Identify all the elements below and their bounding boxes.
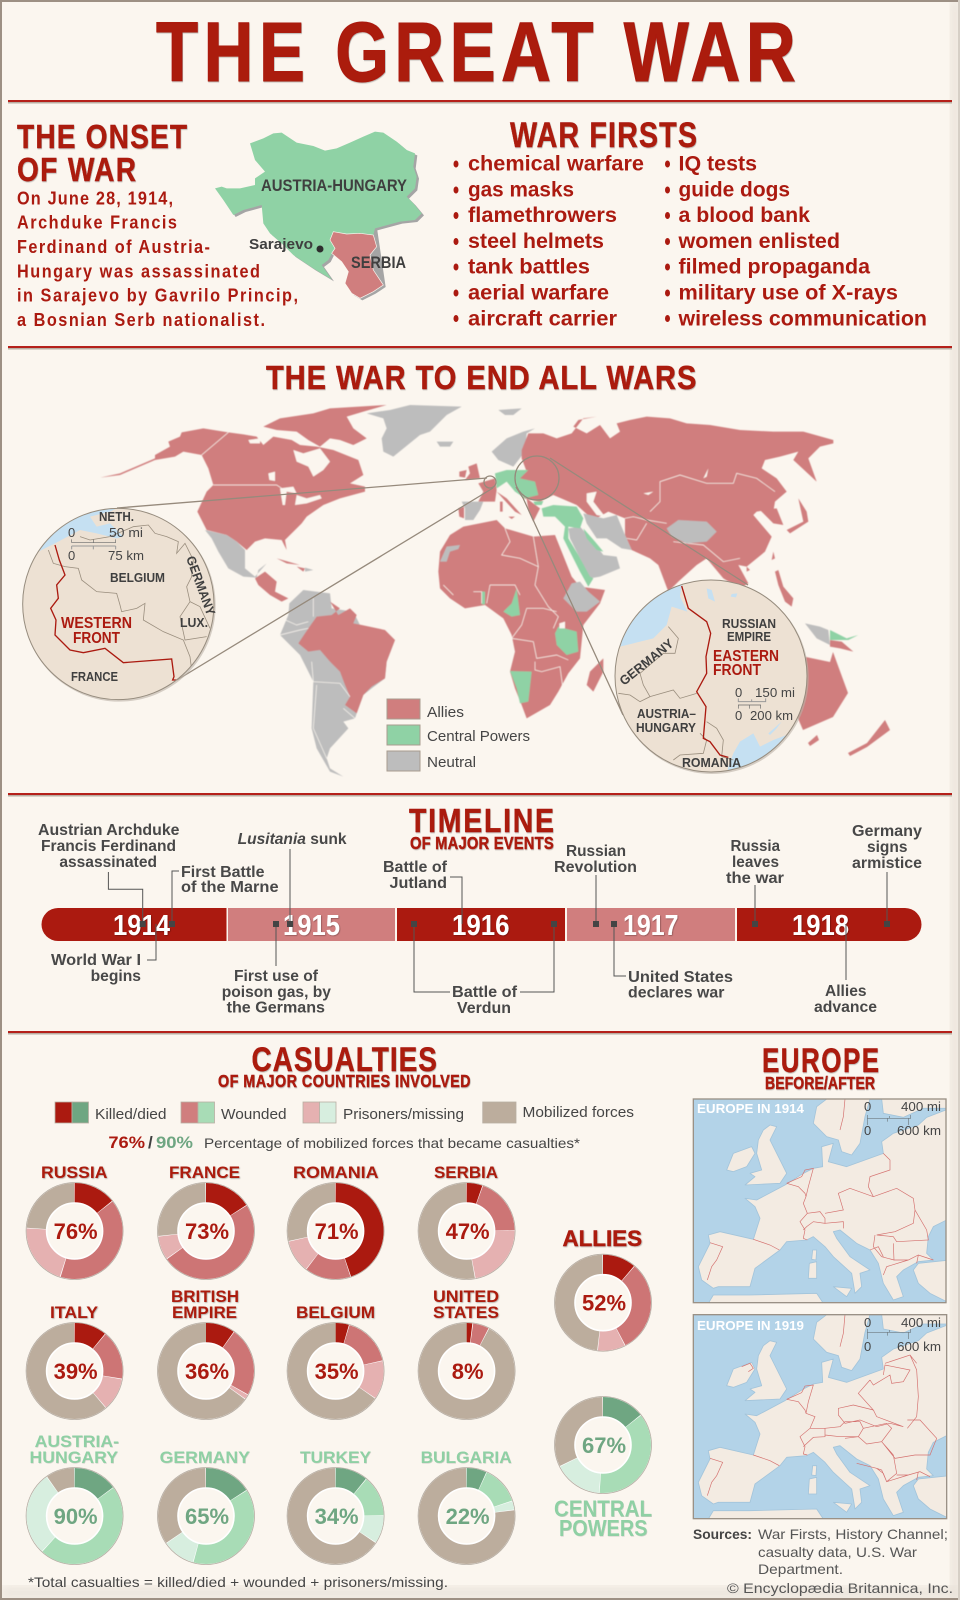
text block: sources: Department. (758, 1561, 843, 1577)
panel: war firsts (454, 115, 927, 330)
donut: Romania (287, 1163, 384, 1280)
scale: miles and kilometres: 75 km (108, 548, 144, 563)
list: war firsts right column: guide dogs (678, 179, 790, 202)
event: First use of poison gas: poison gas, by (222, 984, 331, 1001)
legend: casualty categories: Killed/died (95, 1106, 166, 1123)
map: Europe in 1919 (693, 1315, 950, 1519)
timeline bar: 1918 (792, 910, 849, 942)
text block: assassination summary: Archduke Francis (17, 212, 177, 233)
timeline bar (42, 908, 922, 942)
scale: miles and kilometres: 50 mi (109, 525, 143, 540)
list: war firsts right column (665, 153, 927, 330)
map: Europe in 1914 (693, 1099, 950, 1303)
donut: Bulgaria (418, 1448, 515, 1564)
donut: Belgium: 35% (315, 1359, 359, 1384)
label: France: FRANCE (71, 669, 118, 684)
event: Germany signs armistice: Germany (852, 823, 922, 840)
label: Luxembourg: LUX. (180, 615, 208, 630)
text block: sources: casualty data, U.S. War (758, 1544, 917, 1560)
title: THE GREAT WAR (156, 6, 796, 100)
label: Belgium: BELGIUM (110, 570, 165, 585)
label: Western Front: FRONT (73, 630, 120, 647)
donut: Belgium (287, 1303, 384, 1420)
scale: miles and kilometres: 0 (68, 548, 75, 563)
donut: Allies total: 52% (582, 1291, 626, 1316)
event: Russia leaves the war: the war (726, 870, 784, 887)
heading: Europe before/after: EUROPE (762, 1043, 879, 1080)
donut: Belgium: BELGIUM (296, 1303, 375, 1322)
panel: Europe before and after (693, 1043, 953, 1596)
event: Battle of Jutland: Jutland (390, 875, 447, 892)
label: Russian Empire: RUSSIAN (722, 616, 776, 631)
donut: Central Powers total: POWERS (559, 1515, 648, 1541)
donut: France: 73% (185, 1219, 229, 1244)
heading: the onset of war: OF WAR (17, 152, 136, 189)
scale: miles and kilometres: 0 (735, 685, 742, 700)
event: Austrian Archduke assassinated: Francis Ferdinand (41, 838, 176, 855)
donut: United States: UNITED (433, 1287, 499, 1306)
label: Austria-Hungary: AUSTRIA– (637, 706, 696, 721)
map: Austria-Hungary and Serbia (215, 132, 424, 300)
label: Germany: GERMANY (616, 636, 677, 688)
scale: 1919 map: 0 (864, 1339, 871, 1354)
donut: Central Powers total (554, 1396, 652, 1541)
section divider rules (8, 100, 952, 1034)
donut: Serbia (418, 1163, 515, 1280)
event: Russia leaves the war (726, 838, 784, 887)
donut: British Empire: EMPIRE (172, 1303, 237, 1322)
scale: 1914 map: 0 (864, 1123, 871, 1138)
label: Netherlands: NETH. (99, 509, 134, 524)
event: Battle of Verdun: Battle of (452, 984, 518, 1001)
donut: Romania: ROMANIA (293, 1163, 379, 1182)
donut: United States (418, 1287, 515, 1420)
event: Austrian Archduke assassinated: assassinated (59, 854, 157, 871)
scale: miles and kilometres: 200 km (750, 708, 793, 723)
scale: 1919 map: 600 km (897, 1339, 941, 1354)
scale: 1914 map: 0 (864, 1099, 871, 1114)
event: First use of poison gas (222, 968, 331, 1017)
label: Austria-Hungary: HUNGARY (636, 720, 696, 735)
heading: war firsts: WAR FIRSTS (510, 115, 697, 155)
list: war firsts left column: aerial warfare (468, 282, 609, 305)
event: Allies advance (814, 983, 877, 1016)
scale: miles and kilometres: 0 (68, 525, 75, 540)
event: United States declares war: declares war (628, 985, 724, 1002)
list: war firsts right column: wireless communication (677, 307, 927, 330)
arrow: zoom lines to eastern front (515, 456, 748, 715)
map label: Serbia: SERBIA (351, 253, 406, 272)
event: Germany signs armistice: armistice (852, 855, 922, 872)
scale: 1914 map (864, 1099, 941, 1138)
panel: casualties (26, 1040, 652, 1590)
legend: world map: Neutral (427, 754, 476, 771)
text block: sources: War Firsts, History Channel; (758, 1526, 948, 1542)
panel: timeline (38, 802, 922, 1017)
arrow: zoom lines to western front (117, 476, 496, 680)
donut: Romania: 71% (315, 1219, 359, 1244)
list: war firsts left column: gas masks (468, 179, 574, 202)
donut: Allies total: ALLIES (562, 1226, 642, 1251)
scale: miles and kilometres: 150 mi (755, 685, 795, 700)
donut: Turkey: TURKEY (300, 1448, 372, 1467)
heading: the onset of war: THE ONSET (17, 119, 187, 156)
heading: casualties of major countries involved: CASUALTIES (252, 1040, 437, 1079)
donut: Russia: RUSSIA (41, 1163, 108, 1182)
text block: assassination summary: in Sarajevo by Gavrilo Princip, (17, 285, 298, 306)
timeline bar: 1914 (113, 910, 170, 942)
inset: western front (20, 500, 219, 702)
event: Germany signs armistice (852, 823, 922, 872)
text block: assassination summary: a Bosnian Serb nationalist. (17, 309, 265, 330)
list: war firsts right column: filmed propaganda (678, 256, 870, 279)
event: Battle of Verdun (452, 984, 518, 1017)
heading: casualties of major countries involved (218, 1040, 471, 1091)
inset: eastern front (607, 577, 813, 777)
scale: 1919 map: 0 (864, 1315, 871, 1330)
text block: assassination summary: Hungary was assassinated (17, 260, 260, 282)
event: World War I begins: World War I (51, 952, 141, 969)
heading: timeline of major events: TIMELINE (409, 802, 554, 840)
event: Russian Revolution (554, 843, 637, 876)
scale: 1914 map: 400 mi (901, 1099, 941, 1114)
event: Austrian Archduke assassinated (38, 822, 180, 871)
donut: Italy (26, 1303, 123, 1420)
list: war firsts right column: a blood bank (678, 204, 810, 227)
map title: Europe in 1914: EUROPE IN 1914 (697, 1101, 805, 1116)
event: World War I begins: begins (91, 968, 141, 985)
event: First Battle of the Marne: of the Marne (181, 879, 279, 896)
legend: world map (387, 699, 530, 771)
donut: Allies total (554, 1226, 652, 1351)
text block: assassination summary (17, 187, 298, 330)
legend: percentage key: 76% (108, 1133, 145, 1152)
heading: the onset of war (17, 119, 187, 189)
donut: Italy: ITALY (50, 1303, 99, 1322)
list: war firsts left column: tank battles (468, 256, 590, 279)
donut: United States: STATES (433, 1303, 499, 1322)
icon: Sarajevo dot (316, 246, 324, 252)
donut: British Empire: 36% (185, 1359, 229, 1384)
label: Western Front (61, 615, 132, 647)
legend: casualty categories: Wounded (221, 1106, 287, 1123)
event: Lusitania sunk: Lusitania sunk (238, 831, 347, 848)
scale: miles and kilometres (735, 685, 795, 723)
panel: the onset of war (17, 119, 424, 330)
event: United States declares war: United States (628, 969, 733, 986)
text block: assassination summary: Ferdinand of Austria- (17, 236, 210, 257)
event: World War I begins (51, 952, 141, 985)
panel: the war to end all wars (20, 359, 890, 777)
donut: Germany (158, 1448, 254, 1564)
donut: United States: 8% (452, 1359, 483, 1384)
label: Eastern Front (713, 648, 779, 679)
list: war firsts left column: steel helmets (468, 230, 604, 253)
legend: casualty categories: Mobilized forces (522, 1104, 634, 1121)
label: Romania: ROMANIA (682, 755, 742, 770)
list: war firsts left column: aircraft carrier (468, 307, 617, 330)
event: Battle of Jutland: Battle of (383, 859, 448, 876)
donut: Italy: 39% (54, 1359, 98, 1384)
donut: Germany: GERMANY (160, 1448, 251, 1467)
label: Eastern Front: FRONT (713, 662, 761, 679)
donut: Turkey (287, 1448, 384, 1564)
donut: Serbia: SERBIA (434, 1163, 498, 1182)
list: war firsts right column: women enlisted (677, 230, 840, 253)
donut: British Empire (158, 1287, 254, 1420)
list: war firsts right column: IQ tests (678, 153, 757, 176)
event: Battle of Jutland (383, 859, 448, 892)
event: Russian Revolution: Russian (566, 843, 626, 860)
donut: Central Powers total: 67% (582, 1433, 626, 1458)
text block: assassination summary: On June 28, 1914, (17, 187, 173, 209)
timeline bar: 1917 (623, 910, 678, 942)
event: Russia leaves the war: leaves (732, 854, 779, 871)
donut: Germany: 65% (185, 1504, 229, 1529)
event: First Battle of the Marne: First Battle (181, 864, 265, 881)
heading: casualties of major countries involved: OF MAJOR COUNTRIES INVOLVED (218, 1073, 471, 1091)
scale: 1919 map (864, 1315, 941, 1354)
label: Russian Empire (722, 616, 776, 644)
legend: percentage key: 90% (156, 1133, 193, 1152)
event: First use of poison gas: the Germans (227, 1000, 325, 1017)
footnote: *Total casualties = killed/died + wounded + prisoners/missing. (28, 1574, 448, 1590)
world map: Oceania (790, 623, 890, 756)
donut: Austria-Hungary (26, 1432, 123, 1564)
text block: sources: Sources: (693, 1526, 752, 1542)
donut: Turkey: 34% (315, 1504, 359, 1529)
label: Eastern Front: EASTERN (713, 648, 779, 665)
heading: timeline of major events: OF MAJOR EVENTS (410, 834, 554, 853)
legend: percentage key (108, 1133, 581, 1152)
label: Russian Empire: EMPIRE (727, 629, 771, 644)
credit: © Encyclopædia Britannica, Inc. (727, 1580, 953, 1596)
donut: Bulgaria: 22% (446, 1504, 490, 1529)
timeline bar: 1916 (452, 910, 510, 942)
legend: percentage key: Percentage of mobilized forces that became casualties* (204, 1135, 581, 1151)
label: Austria-Hungary (636, 706, 696, 735)
legend: casualty categories (55, 1102, 634, 1123)
donut: Serbia: 47% (446, 1219, 490, 1244)
event: First Battle of the Marne (181, 864, 279, 896)
donut: Russia: 76% (54, 1219, 98, 1244)
scale: 1914 map: 600 km (897, 1123, 941, 1138)
event: Allies advance: Allies (825, 983, 867, 1000)
scale: 1919 map: 400 mi (901, 1315, 941, 1330)
event: Allies advance: advance (814, 999, 877, 1016)
label: Western Front: WESTERN (61, 615, 132, 632)
event: First use of poison gas: First use of (234, 968, 319, 985)
donut: Austria-Hungary: HUNGARY (30, 1448, 119, 1467)
donut: France: FRANCE (169, 1163, 240, 1182)
event: Germany signs armistice: signs (867, 839, 908, 856)
donut: Bulgaria: BULGARIA (421, 1448, 512, 1467)
legend: casualty categories: Prisoners/missing (343, 1106, 464, 1123)
event: United States declares war (628, 969, 733, 1002)
map title: Europe in 1919: EUROPE IN 1919 (697, 1318, 804, 1333)
donut: Austria-Hungary: 90% (54, 1504, 98, 1529)
label: Germany: GERMANY (183, 554, 219, 618)
text block: sources (693, 1526, 948, 1577)
timeline connector lines and markers (108, 849, 890, 992)
map label: Austria-Hungary: AUSTRIA-HUNGARY (261, 176, 408, 195)
scale: miles and kilometres (68, 525, 144, 563)
heading: the war to end all wars: THE WAR TO END ALL WARS (266, 359, 696, 396)
donut: Russia (26, 1163, 123, 1280)
donut: France (158, 1163, 254, 1280)
heading: Europe before/after: BEFORE/AFTER (765, 1075, 875, 1093)
donut: Central Powers total: CENTRAL (554, 1496, 652, 1522)
event: Battle of Verdun: Verdun (457, 1000, 511, 1017)
event: Russia leaves the war: Russia (730, 838, 780, 855)
world map (100, 405, 890, 777)
event: Russian Revolution: Revolution (554, 859, 637, 876)
legend: world map: Central Powers (427, 728, 530, 745)
list: war firsts left column: chemical warfare (468, 153, 644, 176)
donut: Austria-Hungary: AUSTRIA- (35, 1432, 119, 1451)
donut: British Empire: BRITISH (171, 1287, 239, 1306)
legend: percentage key: / (148, 1133, 153, 1152)
list: war firsts left column: flamethrowers (468, 204, 617, 227)
map label: Sarajevo: Sarajevo (249, 236, 313, 253)
list: war firsts right column: military use of X-rays (678, 282, 898, 305)
event: Austrian Archduke assassinated: Austrian Archduke (38, 822, 180, 839)
list: war firsts left column (454, 153, 644, 330)
legend: world map: Allies (427, 704, 464, 721)
scale: miles and kilometres: 0 (735, 708, 742, 723)
timeline bar: 1915 (283, 910, 340, 942)
